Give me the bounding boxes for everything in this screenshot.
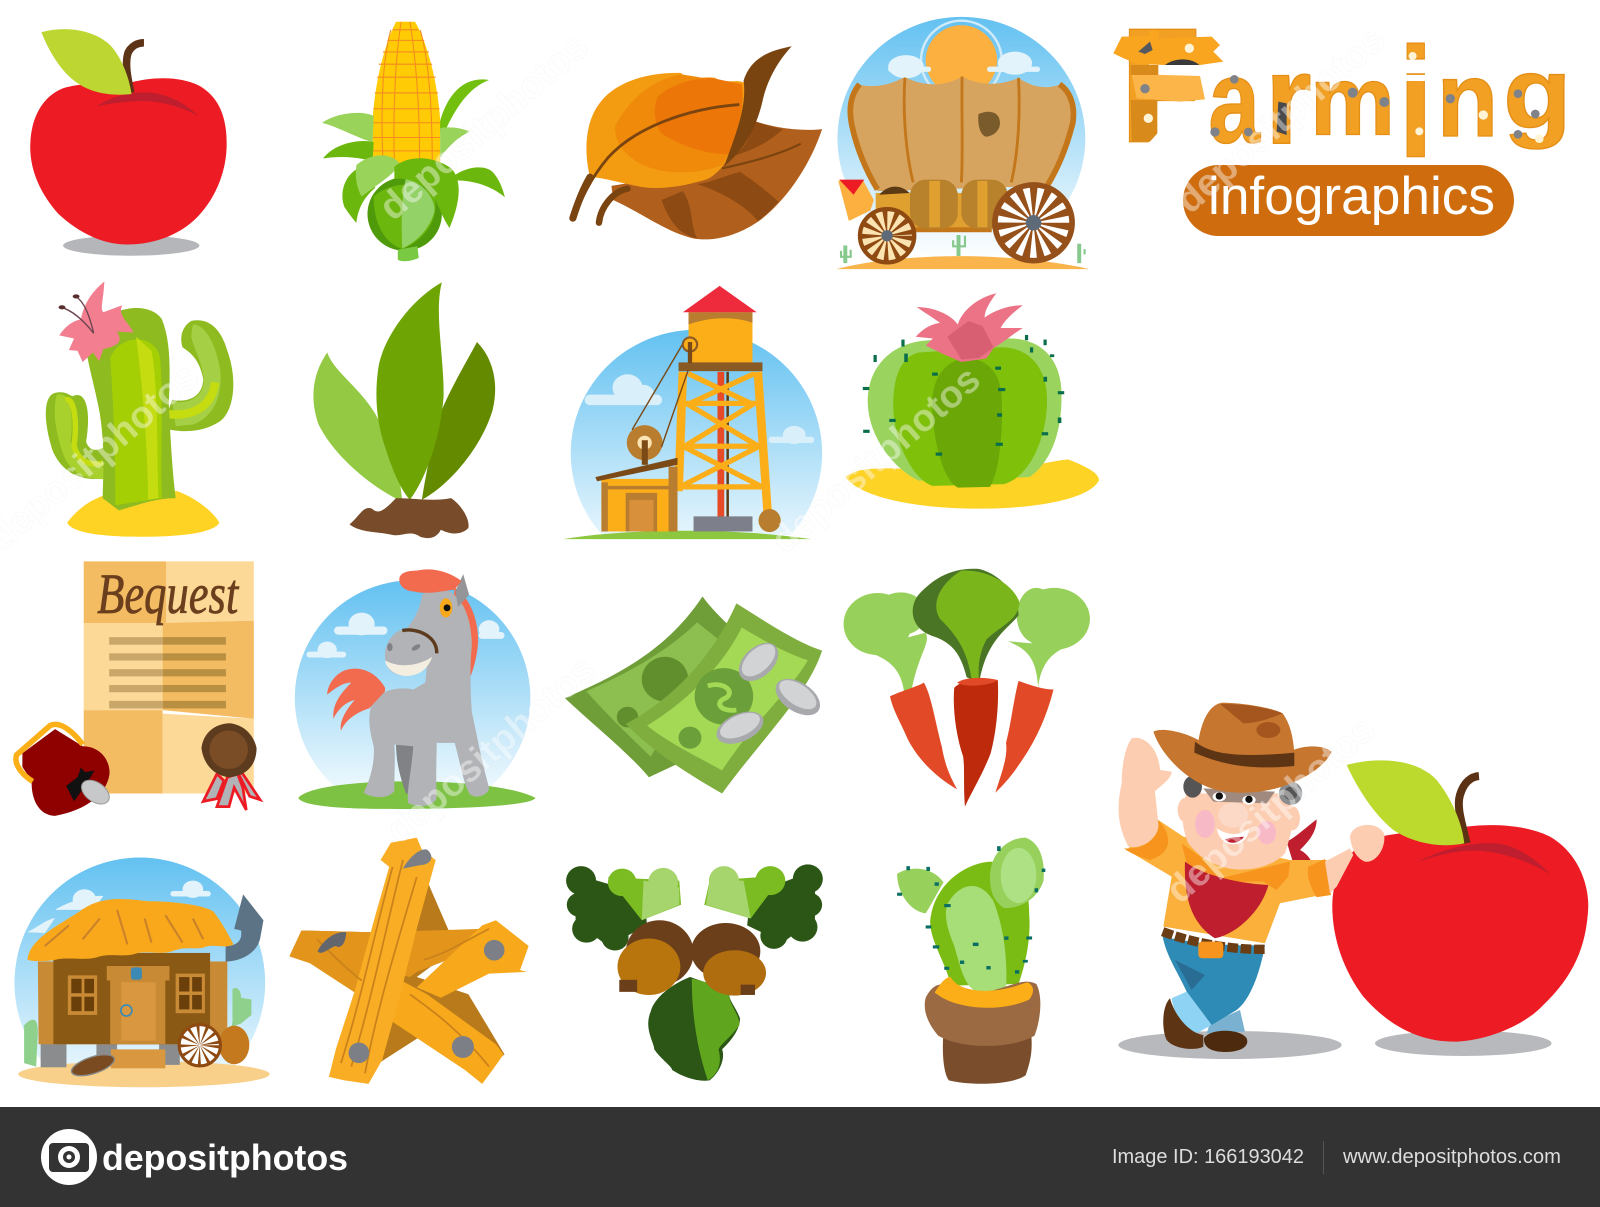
watermark: depositphotos diagonals: depositphotos: [763, 358, 989, 562]
icon: oil derrick with house: [564, 286, 822, 540]
handwritten heading: Bequest: [97, 563, 239, 626]
icon: grey horse: [295, 569, 536, 816]
cowboy figure: [1119, 703, 1384, 1052]
icon: red apple: [30, 29, 227, 256]
wooden title text: m: [1310, 45, 1395, 155]
wooden title text: i: [1398, 16, 1433, 191]
icon: barrel cactus with flower: [845, 293, 1099, 509]
watermark: depositphotos diagonals: depositphotos: [371, 25, 597, 229]
wood plank arm of F: [1132, 74, 1205, 102]
wooden title text: n: [1437, 39, 1498, 159]
icon: green plant sprout: [313, 282, 495, 538]
icon: covered wagon: [836, 17, 1089, 269]
icon: oak leaves and acorns: [566, 864, 823, 1081]
wooden title text: r: [1265, 28, 1312, 171]
title: Farming wooden lettering: [1113, 0, 1572, 191]
wax seal: [201, 723, 257, 777]
watermark: depositphotos diagonals: [0, 18, 1394, 912]
big red apple: [1332, 760, 1588, 1042]
website: www.depositphotos.com: [1342, 1146, 1561, 1168]
logo wordmark: depositphotos: [102, 1137, 348, 1178]
wooden title text: a: [1208, 35, 1261, 169]
icon: flowering cactus: [46, 281, 233, 537]
watermark: depositphotos diagonals: depositphotos: [1168, 18, 1394, 222]
ground shadows: [1118, 1031, 1552, 1059]
footer bar: [0, 1107, 1600, 1207]
icon: corn cob: [322, 22, 505, 261]
subtitle pill: infographics: infographics: [1208, 167, 1495, 226]
wooden title text: g: [1503, 37, 1572, 149]
icon: wooden star: [289, 838, 529, 1084]
icon: cash and coins: [565, 596, 827, 793]
icon: thatched hut: [14, 858, 270, 1108]
icon: bequest document with purse and seal: [16, 561, 260, 816]
ribbon: [203, 772, 260, 810]
illustration: cowboy leaning on apple: [1118, 703, 1588, 1059]
watermark: depositphotos diagonals: depositphotos: [1158, 708, 1384, 912]
icon: three carrots: [844, 569, 1090, 807]
icon: potted cactus: [897, 838, 1045, 1084]
icon: autumn leaves: [573, 46, 822, 239]
watermark: depositphotos diagonals: depositphotos: [378, 648, 604, 852]
coin purse: [22, 729, 110, 816]
image id: Image ID: 166193042: [1112, 1146, 1304, 1168]
logo: camera badge: [41, 1129, 97, 1185]
wood plank top of F: [1113, 30, 1223, 65]
document paper: [84, 561, 166, 623]
